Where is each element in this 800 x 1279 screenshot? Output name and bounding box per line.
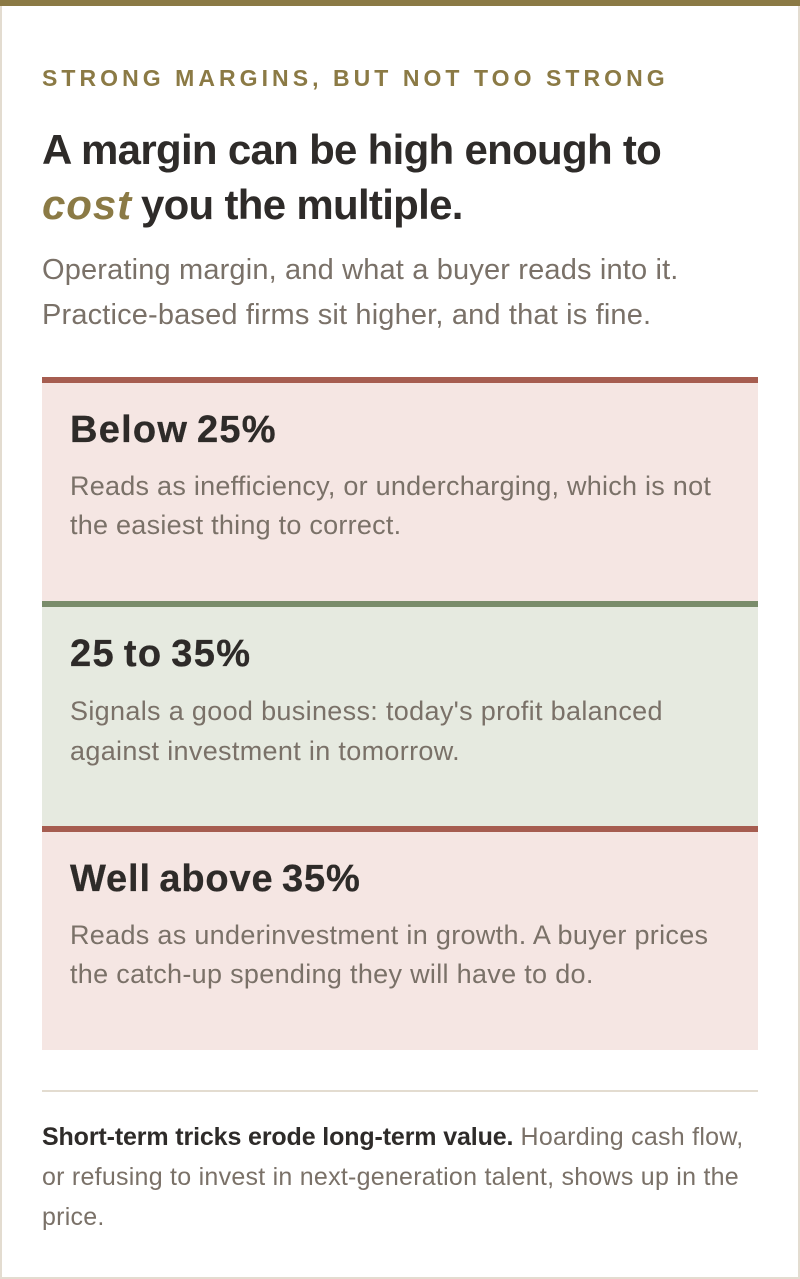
title: cost you the multiple. xyxy=(42,181,463,228)
panel text: below 25%: the easiest thing to correct. xyxy=(70,510,401,540)
subtitle: Operating margin, and what a buyer reads into it. xyxy=(42,254,679,286)
panel text: 25 to 35%: Signals a good business: today's profit balanced xyxy=(70,696,663,726)
panel text: below 25% xyxy=(70,471,711,540)
panel text: well above 35%: Reads as underinvestment in growth. A buyer prices xyxy=(70,920,708,950)
panel text: 25 to 35%: against investment in tomorrow. xyxy=(70,736,460,766)
panel heading: below 25%: Below 25% xyxy=(70,409,277,451)
footer note: price. xyxy=(42,1203,105,1231)
panel text: below 25%: Reads as inefficiency, or undercharging, which is not xyxy=(70,471,711,501)
subtitle xyxy=(42,254,679,331)
footer note xyxy=(42,1123,743,1231)
title xyxy=(42,126,661,228)
panel: below 25% xyxy=(42,377,758,601)
panel heading: well above 35%: Well above 35% xyxy=(70,858,361,900)
top accent bar xyxy=(0,0,800,6)
panel text: 25 to 35% xyxy=(70,696,663,766)
eyebrow: STRONG MARGINS, BUT NOT TOO STRONG xyxy=(42,65,669,91)
panel heading: 25 to 35%: 25 to 35% xyxy=(70,633,251,675)
panel: 25 to 35% xyxy=(42,601,758,826)
title: A margin can be high enough to xyxy=(42,126,661,173)
panel: well above 35% xyxy=(42,826,758,1050)
divider xyxy=(42,1090,758,1092)
footer note: Short-term tricks erode long-term value. Hoarding cash flow, xyxy=(42,1123,743,1151)
footer note: or refusing to invest in next-generation talent, shows up in the xyxy=(42,1163,739,1191)
subtitle: Practice-based firms sit higher, and that is fine. xyxy=(42,299,651,331)
panel text: well above 35% xyxy=(70,920,708,989)
panel text: well above 35%: the catch-up spending they will have to do. xyxy=(70,959,594,989)
